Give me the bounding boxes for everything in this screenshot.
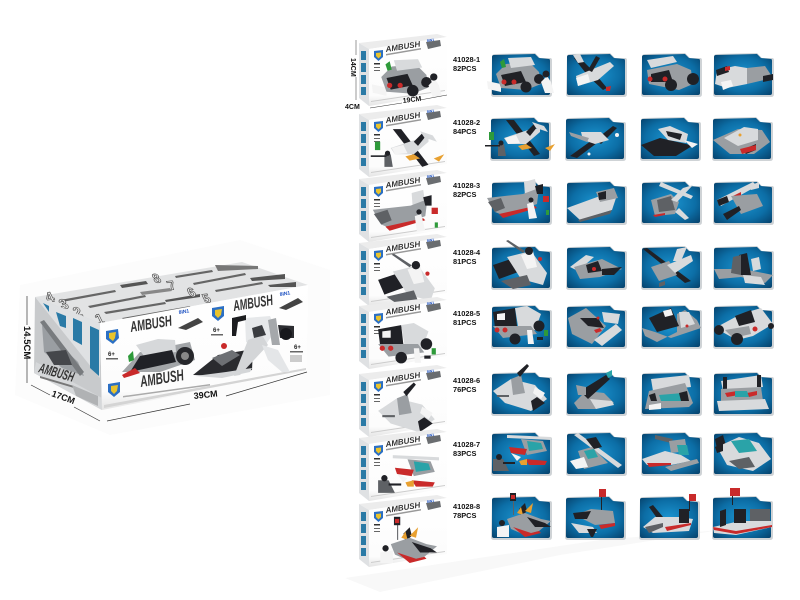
- age labels: 6+: [213, 328, 220, 334]
- carton top face: [35, 262, 308, 328]
- label: 78PCS: [453, 511, 476, 520]
- product box 41028-1: AMBUSH: [384, 40, 421, 54]
- small boat inset: 8IN1: [279, 290, 291, 298]
- tile 2: [566, 246, 627, 290]
- age labels: [106, 328, 303, 362]
- label: 81PCS: [453, 257, 476, 266]
- tile 2: [566, 53, 627, 97]
- brand titles: AMBUSH: [128, 312, 174, 336]
- tile 4: [713, 181, 774, 225]
- tile 4: [712, 488, 773, 540]
- tile 4: [712, 117, 773, 161]
- product box 41028-6: [359, 365, 447, 437]
- row: 41028-5: [359, 297, 774, 369]
- tile 1: [487, 179, 552, 225]
- row: 41028-2: [359, 105, 773, 177]
- size callouts on box: 14CM: [349, 58, 356, 77]
- product box 41028-5: [359, 297, 447, 369]
- size callouts on box: 19CM: [402, 96, 422, 105]
- carton top face: 5: [200, 291, 214, 306]
- label: 41028-4: [453, 248, 480, 257]
- tile 3: [639, 494, 700, 540]
- age labels: 6+: [294, 345, 301, 351]
- product box 41028-5: 8IN1: [427, 301, 435, 306]
- carton left face: [34, 297, 102, 410]
- tile 3: [641, 432, 702, 476]
- label: 76PCS: [453, 385, 476, 394]
- tile 1: [491, 364, 552, 416]
- row: 41028-8: [359, 488, 773, 567]
- product box 41028-4: [359, 234, 447, 306]
- tile 2: [566, 370, 627, 416]
- tile 1: [487, 53, 554, 97]
- carton top face: 1: [93, 312, 108, 328]
- tile 2: [566, 305, 627, 349]
- tile 2: [566, 432, 627, 476]
- tile 3: [641, 181, 702, 225]
- product box 41028-6: 8IN1: [427, 369, 435, 374]
- product box 41028-5: AMBUSH: [384, 303, 421, 317]
- tile 1: [491, 305, 552, 349]
- dimension: carton width: [107, 372, 307, 421]
- carton front face: [100, 285, 308, 410]
- carton top face: 2: [71, 305, 86, 321]
- brand titles: AMBUSH: [138, 367, 185, 391]
- tile 4: [713, 53, 774, 97]
- row: 41028-4: [359, 234, 774, 306]
- product box 41028-2: 8IN1: [427, 109, 435, 114]
- logos: [106, 306, 224, 397]
- label: 41028-8: [453, 502, 480, 511]
- toy robot: [232, 315, 294, 376]
- small boat inset: 8IN1: [178, 308, 190, 316]
- product box 41028-8: 8IN1: [427, 499, 435, 504]
- tile 4: [713, 372, 774, 416]
- dimension: carton height: 14.5CM: [21, 326, 32, 359]
- label: 41028-1: [453, 55, 480, 64]
- product box 41028-7: [359, 429, 447, 501]
- product box 41028-7: 8IN1: [427, 433, 435, 438]
- label: 41028-5: [453, 309, 480, 318]
- tile 3: [641, 53, 702, 97]
- tile 4: [713, 246, 774, 290]
- product box 41028-4: 8IN1: [427, 238, 435, 243]
- label: 82PCS: [453, 64, 476, 73]
- row: 41028-1: [345, 34, 774, 111]
- tile 1: [485, 117, 555, 161]
- size callouts on box: [345, 40, 447, 111]
- label: 83PCS: [453, 449, 476, 458]
- carton top face: 6: [185, 285, 199, 300]
- tile 3: [641, 372, 702, 416]
- tile 2: [565, 117, 626, 161]
- tile 4: [713, 305, 774, 349]
- tile 1: [491, 493, 552, 540]
- label: 41028-6: [453, 376, 480, 385]
- label: 41028-7: [453, 440, 480, 449]
- product box 41028-2: AMBUSH: [384, 111, 421, 125]
- tile 3: [641, 246, 702, 290]
- carton top face: 8: [150, 271, 164, 286]
- row: 41028-6: [359, 364, 774, 437]
- tile 3: [641, 305, 702, 349]
- dimension: carton depth: 17CM: [50, 388, 76, 406]
- product box 41028-2: [359, 105, 447, 177]
- product box 41028-7: AMBUSH: [384, 435, 421, 449]
- toy boat: [193, 343, 253, 378]
- label: 41028-2: [453, 118, 480, 127]
- tile 1: [491, 432, 552, 476]
- label: 82PCS: [453, 190, 476, 199]
- product box 41028-3: [359, 170, 447, 242]
- dimension: carton width: 39CM: [193, 389, 218, 401]
- tile 2: [565, 489, 626, 540]
- size callouts on box: 4CM: [345, 104, 360, 111]
- dimension: carton height: [21, 296, 32, 383]
- dimension: carton depth: [31, 385, 100, 421]
- carton top face: 3: [57, 297, 72, 313]
- panel: master carton: [34, 262, 308, 410]
- row: 41028-7: [359, 429, 774, 501]
- label: 81PCS: [453, 318, 476, 327]
- product box 41028-3: AMBUSH: [384, 176, 421, 190]
- product box 41028-3: 8IN1: [427, 174, 435, 179]
- label: 84PCS: [453, 127, 476, 136]
- product box 41028-1: [359, 34, 447, 106]
- toy truck: [122, 339, 195, 378]
- label: 41028-3: [453, 181, 480, 190]
- product box 41028-8: AMBUSH: [384, 501, 421, 515]
- product box 41028-8: [359, 495, 447, 567]
- brand titles: AMBUSH: [231, 292, 275, 315]
- product box 41028-6: AMBUSH: [384, 371, 421, 385]
- product box 41028-4: AMBUSH: [384, 240, 421, 254]
- tile 3: [640, 117, 701, 161]
- row: 41028-3: [359, 170, 774, 242]
- product box 41028-1: 8IN1: [427, 38, 435, 43]
- brand titles: [123, 292, 275, 398]
- carton top face: 7: [165, 278, 179, 293]
- age labels: 6+: [108, 352, 115, 358]
- small boat inset: [178, 290, 303, 330]
- tile 4: [713, 432, 774, 476]
- carton top face: 4: [43, 290, 58, 306]
- carton left face: AMBUSH: [37, 359, 77, 385]
- tile 1: [491, 240, 552, 290]
- tile 2: [566, 181, 627, 225]
